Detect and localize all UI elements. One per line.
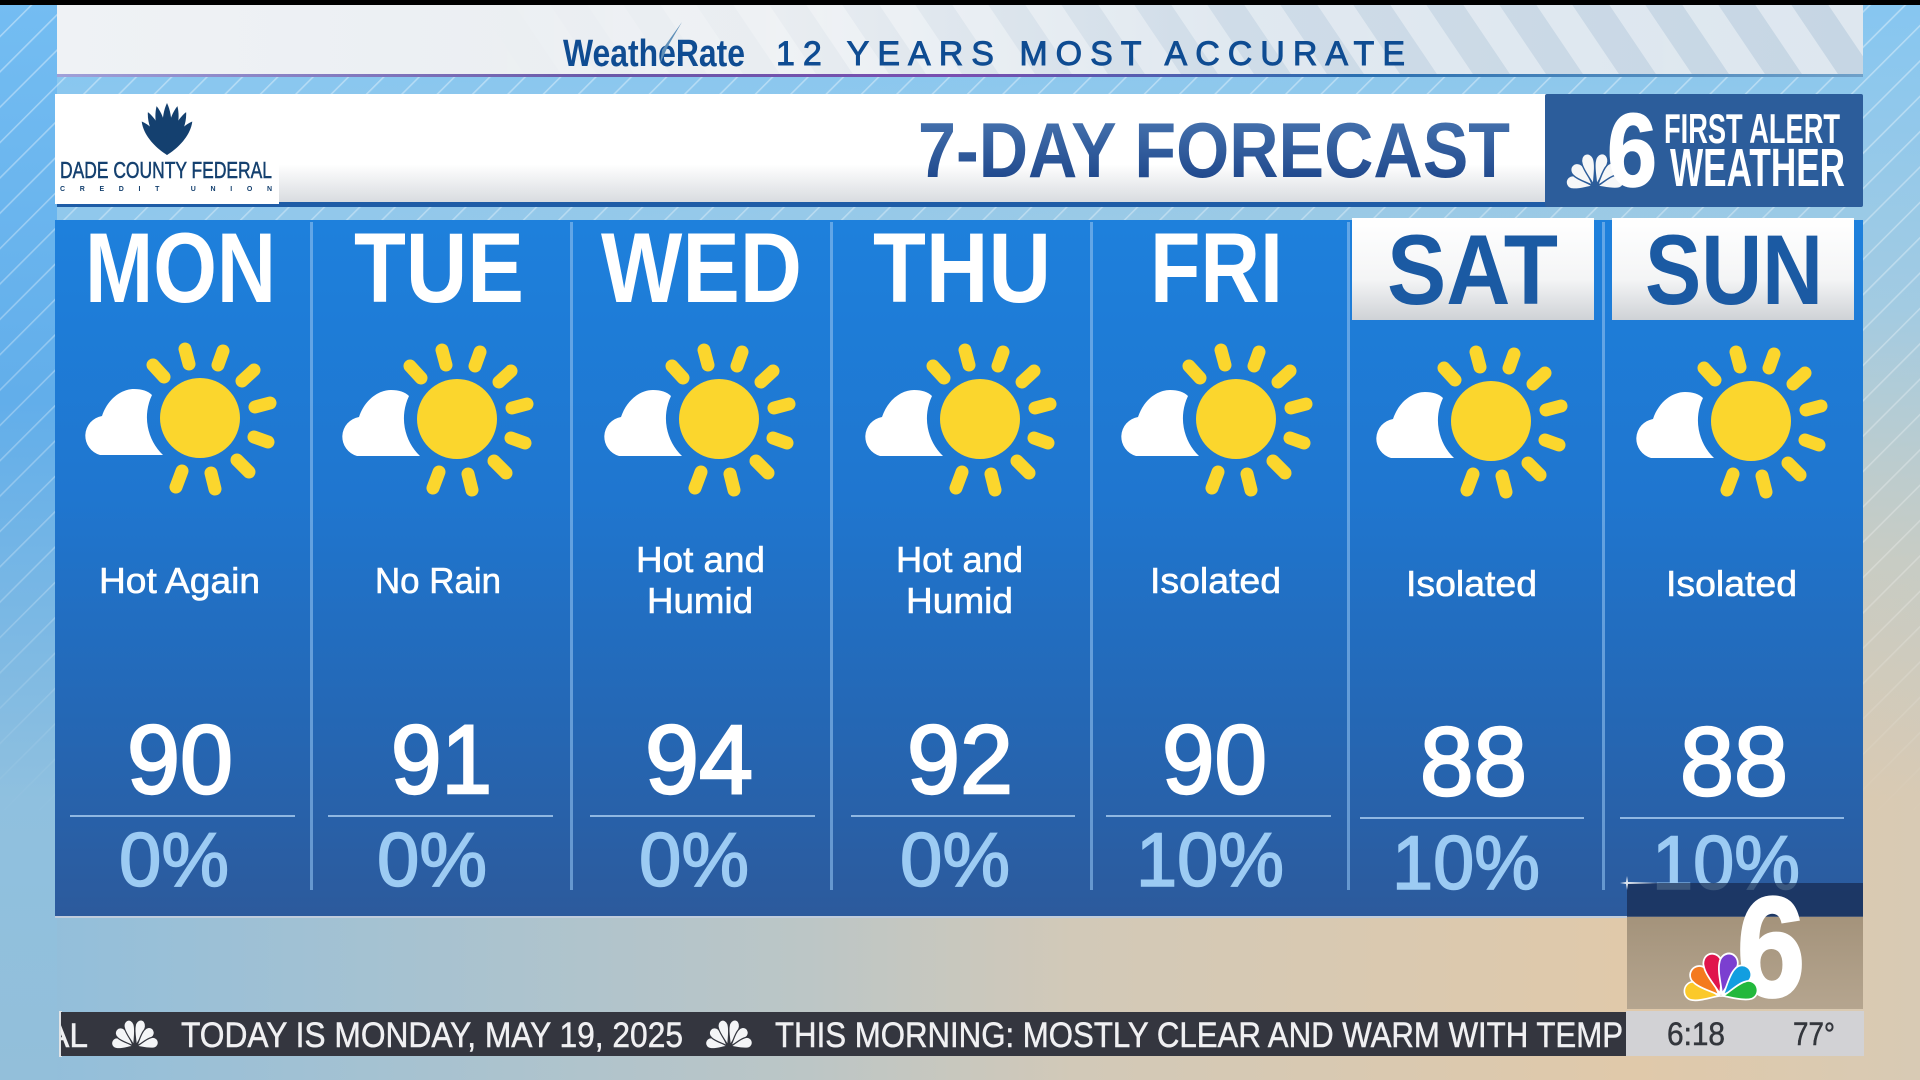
column: Tuesday: No Rain: [375, 560, 501, 601]
sponsor subline: CREDIT UNION: [60, 186, 272, 193]
column: Saturday: [1352, 214, 1594, 906]
column: Monday: Hot Again: [99, 560, 260, 601]
column: Friday: Isolated: [1150, 560, 1281, 601]
column: Thursday: THU: [873, 212, 1051, 323]
column: Monday: [70, 212, 295, 903]
column: Monday: MON: [85, 212, 276, 323]
column: Tuesday: 91: [391, 705, 492, 814]
icon: NBC peacock: [1683, 952, 1759, 1005]
column: Wednesday: WED: [601, 212, 802, 323]
WeatheRate logo: [563, 22, 745, 75]
icon: peacock: [705, 1019, 753, 1052]
icon: peacock: [111, 1019, 159, 1052]
column: Sunday: [1612, 214, 1854, 906]
column: Friday: 90: [1162, 705, 1267, 814]
column: Monday: 90: [127, 705, 233, 814]
column: Thursday: Hot and: [896, 539, 1023, 580]
ticker forecast: THIS MORNING: MOSTLY CLEAR AND WARM WITH TEMP: [775, 1016, 1623, 1055]
column: Thursday: 92: [907, 705, 1013, 814]
sponsor name: DADE COUNTY FEDERAL: [60, 157, 272, 183]
news ticker: [47, 1011, 1626, 1057]
station number: 6: [1607, 93, 1657, 209]
column: Tuesday: 0%: [377, 818, 487, 903]
forecast panel: [55, 212, 1863, 918]
First Alert Weather badge: [1545, 93, 1863, 209]
column: Tuesday: TUE: [354, 212, 524, 323]
column: Sunday: 10%: [1652, 821, 1800, 906]
column: Wednesday: [590, 212, 815, 903]
column: Wednesday: Hot and: [636, 539, 765, 580]
column: Wednesday: 0%: [639, 818, 749, 903]
column: Saturday: 10%: [1392, 821, 1540, 906]
column: Monday: 0%: [119, 818, 229, 903]
column: Sunday: Isolated: [1666, 563, 1797, 604]
sponsor logo: Dade County Federal: [55, 94, 279, 204]
column: Thursday: Humid: [906, 580, 1013, 621]
station number: 6: [1737, 868, 1805, 1027]
column: Friday: FRI: [1150, 212, 1283, 323]
icon: peacock: [1565, 152, 1625, 193]
current temperature: 77°: [1793, 1016, 1835, 1052]
column: Saturday: Isolated: [1406, 563, 1537, 604]
column: Sunday: 88: [1680, 707, 1788, 816]
ticker date: TODAY IS MONDAY, MAY 19, 2025: [181, 1016, 683, 1055]
column: Saturday: SAT: [1387, 214, 1558, 325]
column: Sunday: SUN: [1645, 214, 1823, 325]
column: Friday: 10%: [1136, 818, 1284, 903]
column: Thursday: 0%: [900, 818, 1010, 903]
title bar: [57, 94, 1547, 207]
column: Wednesday: Humid: [647, 580, 753, 621]
title: 7-DAY FORECAST: [918, 106, 1510, 194]
column: Saturday: 88: [1420, 707, 1527, 816]
icon: shell: [138, 103, 196, 158]
column: Tuesday: [328, 212, 553, 903]
top banner: most accurate claim: [57, 5, 1863, 77]
time and temperature bar: [1626, 1011, 1864, 1056]
column: Thursday: [851, 212, 1075, 903]
clock: 6:18: [1667, 1016, 1725, 1052]
ticker fragment: AL: [47, 1017, 88, 1055]
column: Friday: [1106, 212, 1331, 903]
station bug: NBC 6: [1620, 868, 1863, 1027]
column: Wednesday: 94: [645, 705, 753, 814]
WeatheRate logo: WeatheRate: [563, 33, 745, 75]
accuracy tagline: 12 YEARS MOST ACCURATE: [776, 35, 1405, 73]
